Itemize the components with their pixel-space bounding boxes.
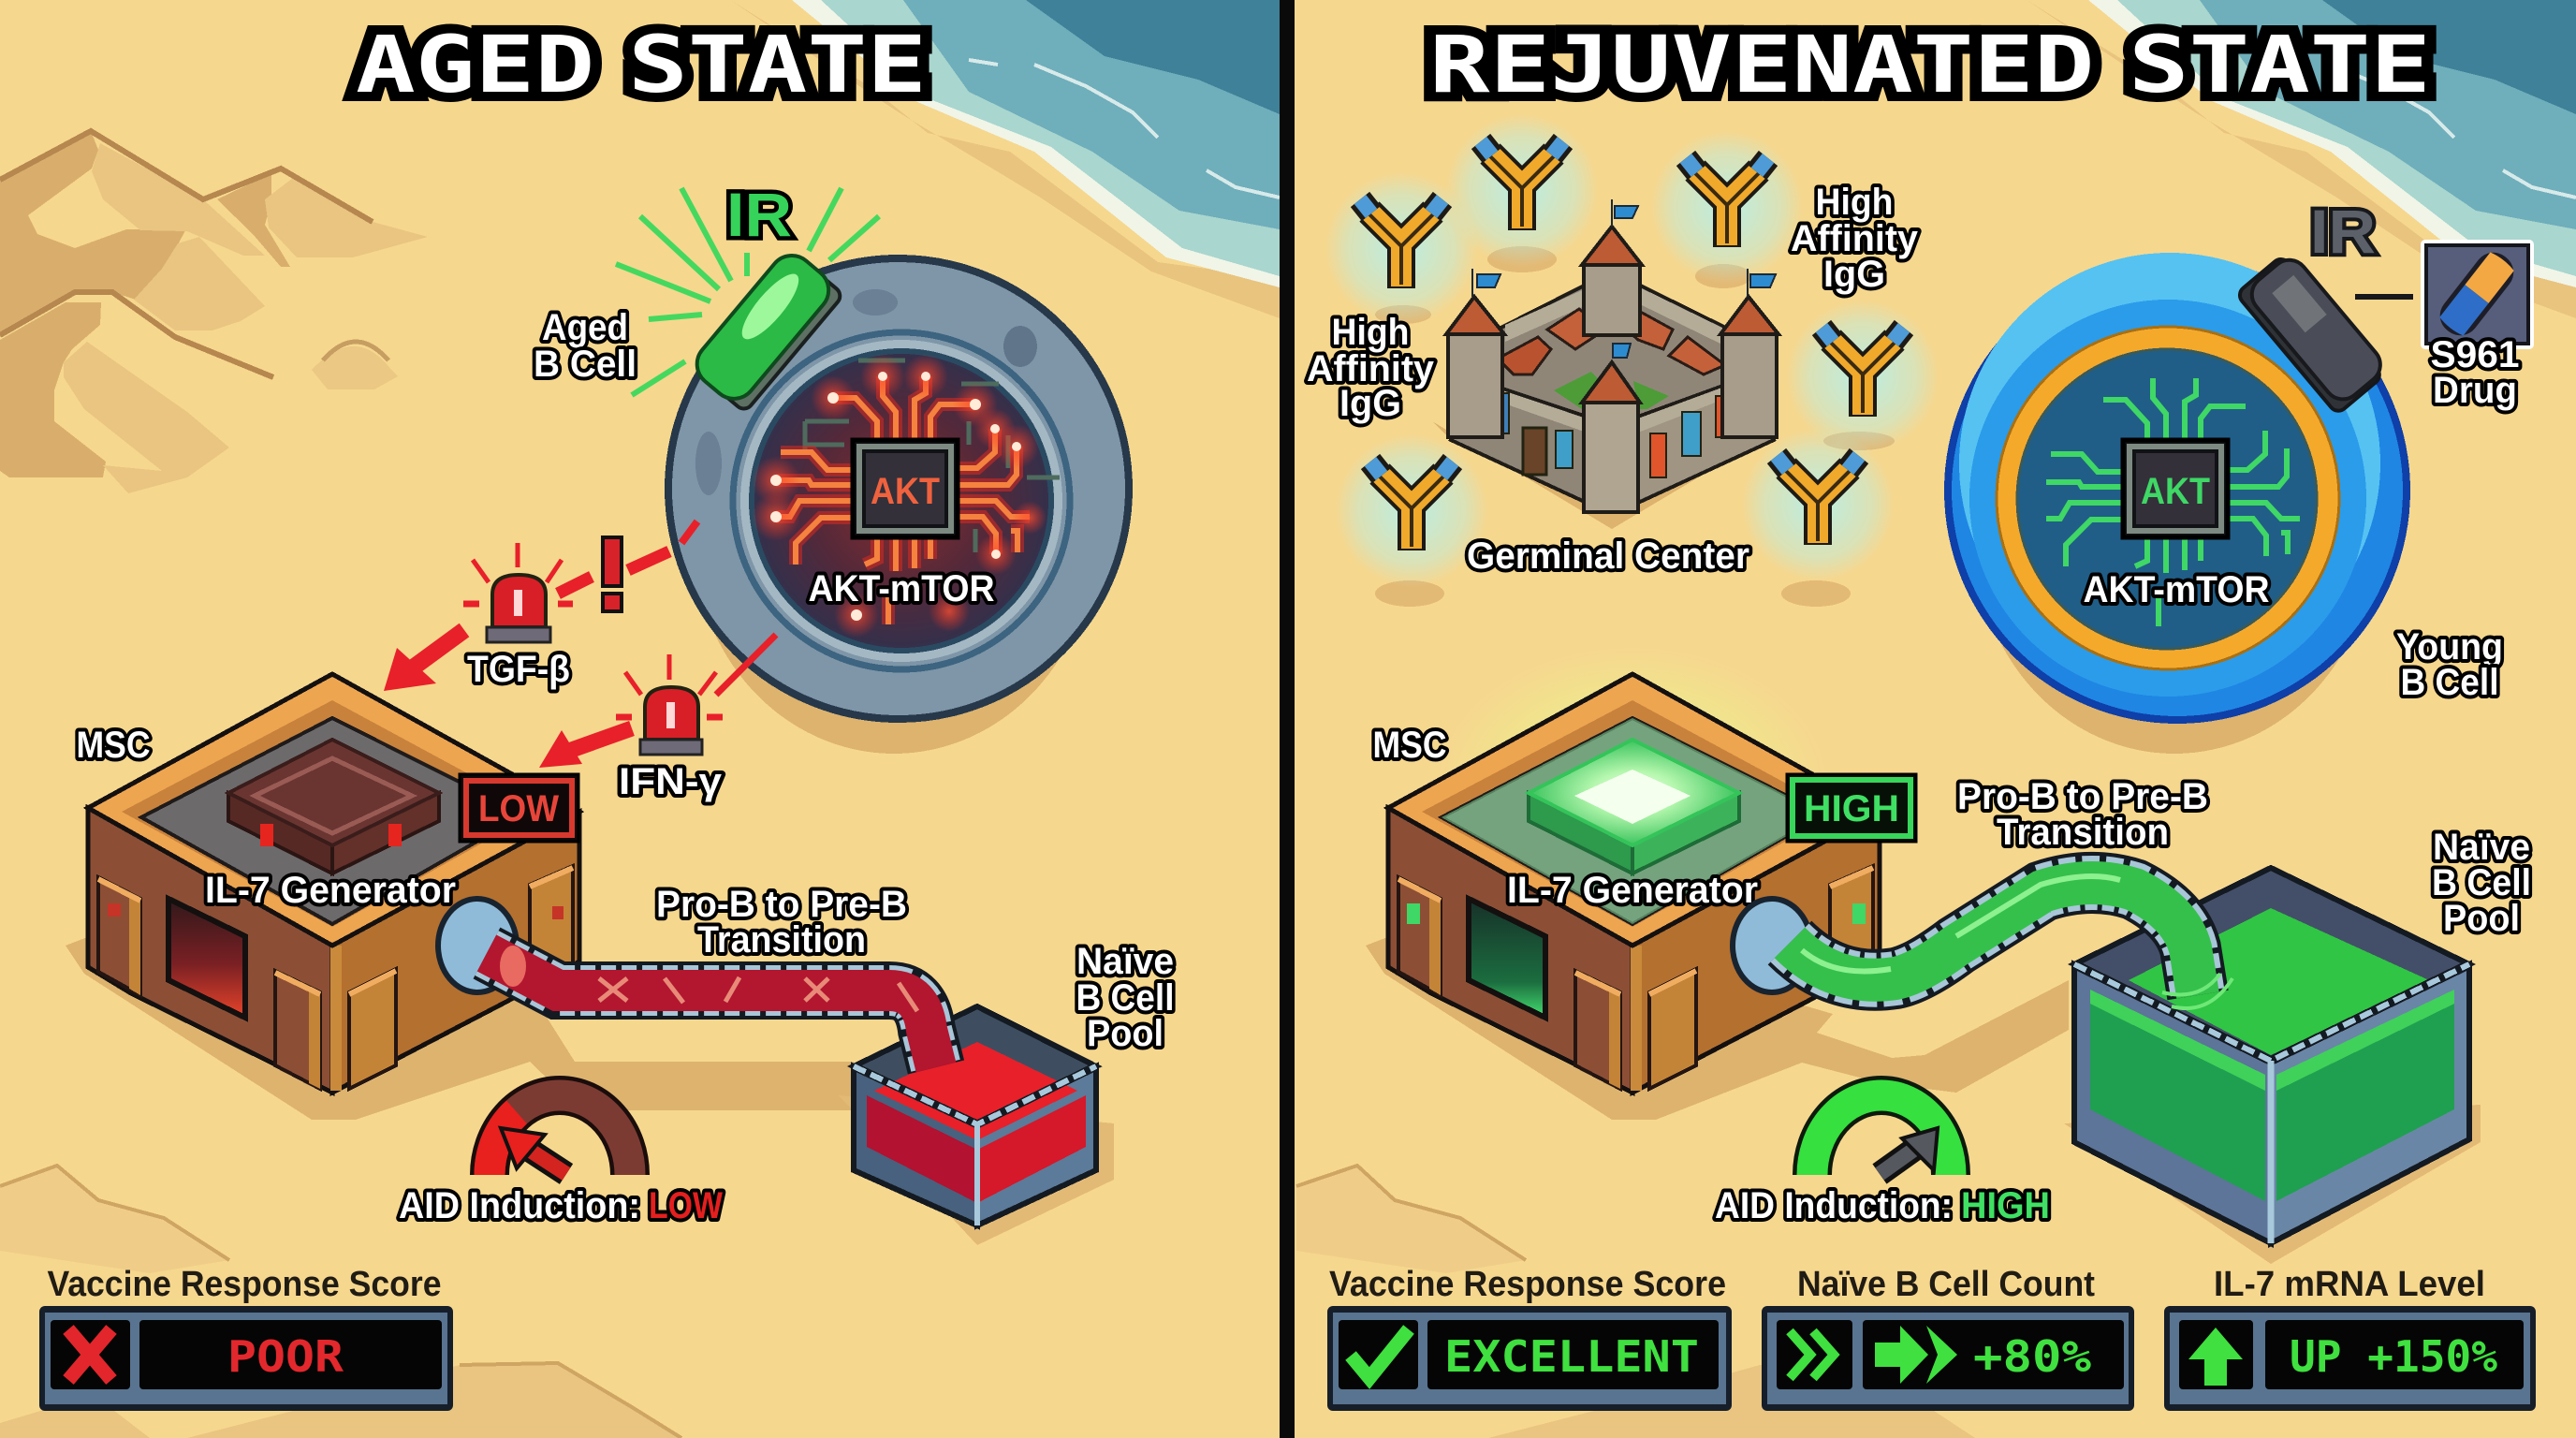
label: IFN-γ: IFN-γ [619, 761, 723, 802]
AKT chip [2123, 440, 2228, 537]
label: AKT-mTOR: AKT-mTOR [809, 568, 995, 609]
icon: fast-forward arrow [1875, 1326, 1928, 1384]
sand spots under antibodies [1375, 246, 1895, 607]
antibodies: high affinity IgG [1325, 113, 1939, 587]
label: MSC: MSC [1372, 725, 1447, 766]
pool shadow: aged [839, 1095, 1114, 1245]
AKT chip: AKT [2141, 471, 2210, 512]
gauge: AID low [490, 1095, 630, 1175]
ocean: rejuvenated panel [2027, 0, 2576, 318]
IL-7 generator core: off [228, 740, 439, 873]
label: Young B Cell: B Cell [2400, 662, 2499, 703]
scorecard: vaccine response poor: POOR [227, 1331, 344, 1382]
transition pipe: aged [438, 899, 936, 1067]
label: S961 Drug [2430, 334, 2520, 411]
label: Pro-B to Pre-B Transition [656, 884, 907, 961]
ocean: aged panel [730, 0, 1280, 318]
heading: Naive B Cell Count: Naïve B Cell Count [1797, 1265, 2095, 1304]
label: Naive B Cell Pool [1076, 941, 1174, 1054]
divider [1280, 0, 1295, 1438]
green halo [1436, 646, 1829, 927]
disc shadow: aged [693, 314, 1095, 754]
red inhibitory arrows [384, 521, 776, 768]
ground shadows: rejuvenated building and pipe [1366, 936, 2069, 1120]
label: High Affinity IgG left: Affinity [1307, 348, 1435, 389]
scorecard: IL-7 mRNA level: UP +150% [2290, 1331, 2497, 1382]
insulin receptor: active green [616, 188, 879, 414]
icon: up arrow [2188, 1328, 2243, 1386]
label: Naive B Cell Pool: Naïve [2433, 827, 2530, 868]
label: MSC: MSC [77, 725, 150, 766]
label: TGF-β: TGF-β [467, 649, 570, 690]
status badge: HIGH: HIGH [1804, 788, 1899, 829]
label: Naive B Cell Pool [2432, 827, 2531, 939]
label: AID Induction LOW: AID Induction: [399, 1185, 640, 1226]
label: Pro-B to Pre-B Transition: Transition [697, 919, 866, 961]
icon: red X [68, 1329, 111, 1380]
label: AID Induction HIGH: AID Induction: [1715, 1185, 1953, 1226]
label: High Affinity IgG right: High [1816, 182, 1893, 223]
label: IR: IR [726, 180, 792, 249]
panel: aged state [0, 0, 1280, 1438]
icon: green check [1351, 1329, 1409, 1378]
scorecard: vaccine response excellent: EXCELLENT [1444, 1331, 1699, 1382]
AKT circuit traces [752, 354, 1060, 638]
label: Pro-B to Pre-B Transition: Transition [1997, 812, 2169, 853]
germinal center castle [1432, 199, 1793, 529]
label: High Affinity IgG right: IgG [1823, 254, 1885, 295]
label: Naive B Cell Pool: Naïve [1076, 941, 1174, 982]
label: Pro-B to Pre-B Transition [1957, 776, 2208, 853]
title: rejuvenated state: REJUVENATED STATE [1429, 19, 2431, 110]
dunes: rejuvenated panel [1296, 1166, 1975, 1438]
label: IR blocked: IR [2310, 197, 2376, 266]
naive B cell pool: aged [854, 1006, 1096, 1225]
heading: Vaccine Response Score: Vaccine Response Score [1329, 1265, 1726, 1304]
status badge: LOW: LOW [478, 788, 559, 829]
status badge: HIGH [1787, 774, 1916, 842]
label: High Affinity IgG left: IgG [1339, 383, 1401, 424]
label: S961 Drug: Drug [2433, 370, 2517, 411]
young B cell with AKT-mTOR circuit [1944, 253, 2410, 724]
label: High Affinity IgG left [1307, 312, 1435, 424]
label: Naive B Cell Pool: B Cell [1076, 977, 1174, 1019]
scorecard: IL-7 mRNA level [2164, 1306, 2536, 1411]
pool shadow: rejuvenated [2064, 1105, 2481, 1264]
castle flags [1472, 199, 1776, 358]
gauge: AID high [1812, 1095, 1951, 1175]
AKT circuit traces [2046, 378, 2300, 626]
label: Pro-B to Pre-B Transition: Pro-B to Pre-B [1957, 776, 2208, 817]
label: High Affinity IgG right [1791, 182, 1919, 295]
heading: IL-7 mRNA Level: IL-7 mRNA Level [2214, 1265, 2485, 1304]
scorecard: naive B cell count: +80% [1973, 1331, 2091, 1382]
aged B cell with AKT-mTOR circuit [668, 258, 1129, 719]
rock: aged panel [312, 342, 398, 389]
status badge: LOW [460, 774, 578, 842]
scorecard: vaccine response excellent [1327, 1306, 1732, 1411]
label: Naive B Cell Pool: B Cell [2432, 862, 2531, 903]
label: Naive B Cell Pool: Pool [1087, 1013, 1164, 1054]
alarm: IFN-γ [616, 654, 723, 755]
label: IL-7 Generator: IL-7 Generator [205, 870, 456, 911]
label: Pro-B to Pre-B Transition: Pro-B to Pre-B [656, 884, 907, 925]
glowing trace nodes [752, 354, 1046, 638]
transition pipe: rejuvenated [1733, 876, 2232, 1008]
label: Aged B Cell: B Cell [534, 344, 637, 385]
disc shadow: young [1974, 314, 2375, 754]
dunes: aged panel [0, 131, 681, 1438]
icon: double chevrons [1790, 1331, 1834, 1378]
ground shadows: aged building and pipe [66, 936, 854, 1120]
label: Young B Cell: Young [2396, 626, 2503, 668]
IL-7 generator core: on [1529, 740, 1739, 873]
scorecard: vaccine response poor [39, 1306, 453, 1411]
castle towers [1446, 227, 1778, 512]
exclamation mark [603, 537, 622, 611]
label: IL-7 Generator: IL-7 Generator [1507, 870, 1758, 911]
label: High Affinity IgG right: Affinity [1791, 218, 1919, 259]
icon: S961 drug [2422, 242, 2532, 347]
alarm: TGF-β [463, 543, 573, 642]
label: Aged B Cell [534, 307, 637, 385]
label: Young B Cell [2396, 626, 2503, 703]
panel: rejuvenated state [1296, 0, 2576, 1438]
AKT chip [853, 440, 958, 537]
label: Germinal Center: Germinal Center [1467, 536, 1749, 577]
label: AKT-mTOR: AKT-mTOR [2084, 569, 2270, 610]
connector line [2355, 294, 2413, 300]
label: AID Induction HIGH: HIGH [1961, 1185, 2050, 1226]
MSC building: aged [88, 674, 579, 1093]
heading: Vaccine Response Score aged: Vaccine Response Score [47, 1265, 442, 1304]
MSC building: rejuvenated [1388, 674, 1880, 1093]
scorecard: naive B cell count [1762, 1306, 2134, 1411]
title: aged state: AGED STATE [356, 19, 927, 110]
label: Naive B Cell Pool: Pool [2443, 898, 2520, 939]
label: S961 Drug: S961 [2430, 334, 2520, 375]
label: AID Induction LOW: LOW [649, 1185, 723, 1226]
AKT chip: AKT [871, 471, 940, 512]
label: Aged B Cell: Aged [542, 307, 628, 348]
naive B cell pool: rejuvenated [2074, 868, 2469, 1243]
insulin receptor: blocked grey [2236, 250, 2391, 415]
label: High Affinity IgG left: High [1331, 312, 1410, 353]
